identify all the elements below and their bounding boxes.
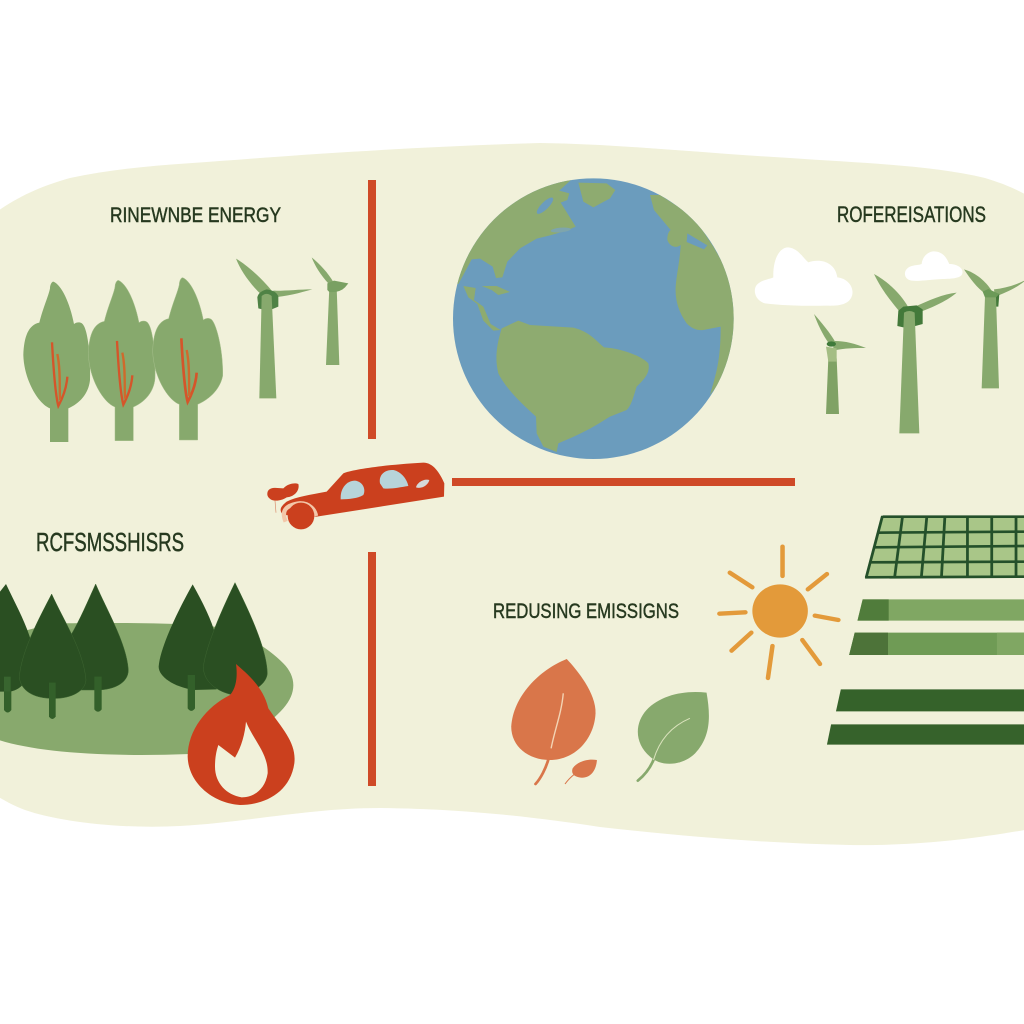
vertical divider upper <box>368 180 376 439</box>
green leaf <box>638 692 709 781</box>
infographic canvas <box>0 143 1024 846</box>
burning trees group <box>23 257 348 442</box>
heading: forest label: RCFSMSSHISRS <box>36 527 184 557</box>
panel: renewable energy <box>23 204 348 442</box>
globe lakes <box>535 195 707 249</box>
tree 3 <box>153 278 223 440</box>
wind turbine left <box>814 314 866 414</box>
wind turbine centre <box>874 274 957 433</box>
panel: reducing emissions <box>493 516 1024 784</box>
tree 1 <box>23 282 90 442</box>
wind turbine right <box>964 269 1024 388</box>
orange leaf <box>511 659 596 784</box>
vertical divider lower <box>368 552 376 786</box>
tree cluster left <box>0 584 128 719</box>
solar panel <box>865 516 1024 578</box>
car icon <box>267 463 444 529</box>
sun icon <box>719 547 838 678</box>
flame icon <box>188 664 295 805</box>
tree 2 <box>88 280 155 441</box>
heading: reforestations: ROFEREISATIONS <box>837 202 986 227</box>
wind turbine large <box>236 259 312 398</box>
green stripe 4 <box>827 724 1024 745</box>
horizontal divider <box>452 478 795 486</box>
wind turbine small <box>312 257 348 365</box>
globe <box>443 170 740 459</box>
background cream blob <box>0 143 1024 845</box>
cloud large <box>755 247 853 306</box>
green stripe 3 <box>836 689 1024 711</box>
green stripe 2 <box>849 633 1024 655</box>
heading: renewable energy: RINEWNBE ENERGY <box>110 204 281 227</box>
tree cluster right <box>159 583 267 711</box>
green stripe 1 <box>857 599 1024 621</box>
panel: forest and fire <box>0 463 444 805</box>
panel: reforestation <box>755 202 1024 433</box>
cloud small <box>905 251 963 281</box>
green hill <box>0 623 293 755</box>
small orange leaf <box>565 760 597 784</box>
heading: reducing emissions: REDUSING EMISSIGNS <box>493 600 679 623</box>
